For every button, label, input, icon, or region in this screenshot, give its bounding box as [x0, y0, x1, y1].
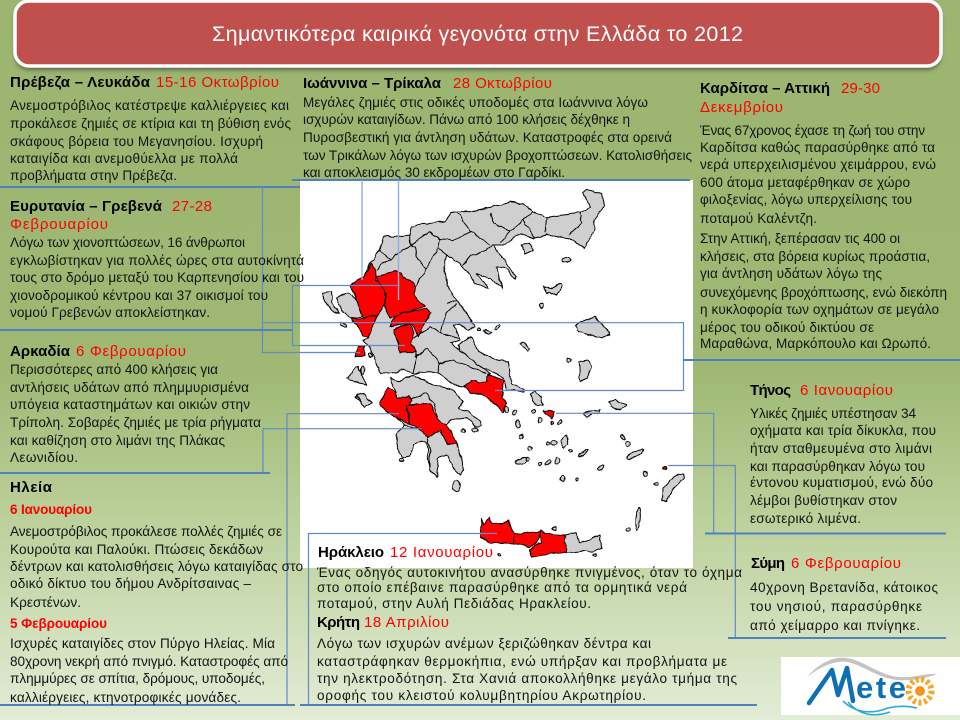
text block: Tinos: λέμβοι βυθίστηκαν στον	[750, 493, 897, 508]
text block: Preveza - Lefkada: προκάλεσε ζημιές σε κτίρια και τη βύθιση ενός	[10, 116, 291, 131]
text block: Evrytania - Grevena: Λόγω των χιονοπτώσεων, 16 άνθρωποι	[10, 235, 245, 250]
text block: Karditsa - Attica: Στην Αττική, ξεπέρασαν τις 400 οι	[700, 231, 900, 246]
text block: Tinos	[750, 382, 936, 526]
text block: Ilia: Ισχυρές καταιγίδες στον Πύργο Ηλείας. Μία	[10, 636, 275, 651]
text block: Karditsa - Attica: ποταμού Καλέντζη.	[700, 211, 817, 226]
text block: Preveza - Lefkada: Ανεμοστρόβιλος κατέστρεψε καλλιέργειες και	[10, 98, 289, 113]
text block: Karditsa - Attica: φιλοξενίας, λόγω υπερχείλισης του	[700, 192, 912, 207]
text block: Simi: Σύμη	[751, 555, 785, 572]
text block: Arcadia: υπόγεια καταστημάτων και οικιών στην	[10, 397, 250, 412]
text block: Arcadia: 6 Φεβρουαρίου	[76, 343, 186, 360]
text block: Crete: την ηλεκτροδότηση. Στα Χανιά αποκολλήθηκε μεγάλο τμήμα της	[317, 671, 737, 686]
text block: Crete: οροφής του κλειστού κολυμβητηρίου Ακρωτηρίου.	[317, 688, 646, 703]
text block: Ioannina - Trikala: Ιωάννινα – Τρίκαλα	[303, 75, 442, 92]
title banner: Σημαντικότερα καιρικά γεγονότα στην Ελλάδα το 2012	[212, 22, 743, 46]
text block: Karditsa - Attica: συνεχόμενης βροχόπτωσης, ενώ διεκόπη	[700, 285, 947, 300]
text block: Arcadia	[10, 343, 261, 465]
text block: Preveza - Lefkada: καταιγίδα και ανεμοθύελλα με πολλά	[10, 151, 238, 166]
text block: Ilia: 80χρονη νεκρή από πνιγμό. Καταστροφές από	[10, 654, 288, 669]
text block: Karditsa - Attica: 600 άτομα μεταφέρθηκαν σε χώρο	[700, 175, 910, 190]
text block: Evrytania - Grevena: Φεβρουαρίου	[10, 216, 108, 233]
text block: Ilia: Κουρούτα και Παλούκι. Πτώσεις δεκάδων	[10, 542, 263, 557]
text block: Tinos: ήταν σταθμευμένα στο λιμάνι	[750, 441, 932, 456]
text block: Karditsa - Attica: Καρδίτσα – Αττική	[700, 80, 830, 97]
text block: Ioannina - Trikala: Μεγάλες ζημιές στις οδικές υποδομές στα Ιωάννινα λόγω	[303, 95, 648, 110]
text block: Ilia: δέντρων και κατολισθήσεις λόγω καταιγίδας στο	[10, 559, 303, 574]
text block: Evrytania - Grevena	[10, 198, 304, 320]
text block: Ioannina - Trikala: ισχυρών καταιγίδων. Πάνω από 100 κλήσεις δέχθηκε η	[303, 112, 630, 127]
text block: Heraklion: στο οποίο επέβαινε παρασύρθηκε από τα ορμητικά νερά	[317, 580, 687, 595]
text block: Ilia: καλλιέργειες, κτηνοτροφικές μονάδες.	[10, 690, 241, 705]
title banner	[15, 1, 941, 70]
text block: Karditsa - Attica: Μαραθώνα, Μαρκόπουλο και Ωρωπό.	[700, 336, 931, 351]
text block: Crete	[317, 614, 737, 703]
text block: Crete: Κρήτη	[317, 614, 360, 631]
text block: Arcadia: και καθίζηση στο λιμάνι της Πλάκας	[10, 433, 225, 448]
text block: Ilia: Κρεστένων.	[10, 595, 81, 610]
text block: Simi	[750, 555, 938, 633]
text block: Ilia: Ηλεία	[10, 479, 53, 496]
text block: Tinos: οχήματα και τρία δίκυκλα, που	[750, 423, 936, 438]
text block: Karditsa - Attica: για άντληση υδάτων λόγω της	[700, 266, 882, 281]
map panel: Greece	[300, 180, 693, 568]
text block: Ilia: 6 Ιανουαρίου	[10, 502, 92, 517]
text block: Crete: καταστράφηκαν θερμοκήπια, ενώ υπήρξαν και προβλήματα με	[317, 654, 727, 669]
text block: Ioannina - Trikala: και αποκλεισμός 30 εκδρομέων στο Γαρδίκι.	[303, 165, 565, 180]
text block: Ioannina - Trikala: Πυροσβεστική για άντληση υδάτων. Καταστροφές στα ορεινά	[303, 130, 672, 145]
connector lines	[0, 180, 960, 706]
text block: Tinos: και παρασύρθηκαν λόγω του	[750, 459, 925, 474]
text block: Ioannina - Trikala: 28 Οκτωβρίου	[453, 75, 552, 92]
text block: Preveza - Lefkada	[10, 74, 291, 183]
text block: Karditsa - Attica: Ένας 67χρονος έχασε τη ζωή του στην	[699, 123, 925, 138]
text block: Preveza - Lefkada: 15-16 Οκτωβρίου	[156, 74, 279, 91]
text block: Heraklion: 12 Ιανουαρίου	[390, 544, 493, 561]
text block: Heraklion	[316, 544, 742, 611]
text block: Karditsa - Attica: νερά υπερχειλισμένου χειμάρρου, ενώ	[700, 157, 936, 172]
logo: Meteo	[781, 657, 960, 715]
text block: Tinos: έντονου κυματισμού, ενώ δύο	[750, 475, 933, 490]
text block: Arcadia: Λεωνιδίου.	[10, 450, 78, 465]
text block: Tinos: 6 Ιανουαρίου	[800, 382, 893, 399]
text block: Crete: 18 Απριλίου	[364, 614, 449, 631]
text block: Preveza - Lefkada: Πρέβεζα – Λευκάδα	[10, 74, 151, 91]
text block: Evrytania - Grevena: Ευρυτανία – Γρεβενά	[10, 198, 163, 215]
text block: Arcadia: Τρίπολη. Σοβαρές ζημιές με τρία ρήγματα	[10, 415, 261, 430]
text block: Karditsa - Attica: μέρος του οδικού δικτύου σε	[700, 320, 874, 335]
text block: Ilia: οδικό δίκτυο του δήμου Ανδρίτσαινας –	[10, 576, 251, 591]
text block: Ilia: Ανεμοστρόβιλος προκάλεσε πολλές ζημιές σε	[10, 524, 282, 539]
text block: Ioannina - Trikala: των Τρικάλων λόγω των ισχυρών βροχοπτώσεων. Κατολισθήσεις	[303, 148, 692, 163]
text block: Karditsa - Attica: η κυκλοφορία των οχημάτων σε μεγάλο	[700, 302, 939, 317]
text block: Karditsa - Attica	[699, 80, 947, 351]
text block: Simi: από χείμαρρο και πνίγηκε.	[750, 618, 920, 633]
text block: Ilia: 5 Φεβρουαρίου	[10, 616, 107, 631]
text block: Arcadia: αντλήσεις υδάτων από πλημμυρισμένα	[10, 380, 249, 395]
text block: Ilia: πλημμύρες σε σπίτια, δρόμους, υποδομές,	[10, 671, 265, 686]
text block: Heraklion: Ένας οδηγός αυτοκινήτου ανασύρθηκε πνιγμένος, όταν το όχημα	[316, 565, 742, 580]
text block: Preveza - Lefkada: προβλήματα στην Πρέβεζα.	[10, 168, 177, 183]
text block: Arcadia: Περισσότερες από 400 κλήσεις για	[10, 362, 218, 377]
text block: Ioannina - Trikala	[303, 75, 692, 180]
text block: Karditsa - Attica: Δεκεμβρίου	[700, 99, 783, 116]
text block: Tinos: Υλικές ζημιές υπέστησαν 34	[750, 406, 916, 421]
text block: Simi: του νησιού, παρασύρθηκε	[750, 599, 922, 614]
text block: Simi: 40χρονη Βρετανίδα, κάτοικος	[750, 580, 938, 595]
text block: Evrytania - Grevena: 27-28	[172, 198, 212, 215]
text block: Evrytania - Grevena: εγκλωβίστηκαν για πολλές ώρες στα αυτοκίνητά	[10, 253, 304, 268]
text block: Karditsa - Attica: Καρδίτσα καθώς παρασύρθηκε από τα	[700, 140, 935, 155]
text block: Evrytania - Grevena: νομού Γρεβενών αποκλείστηκαν.	[10, 305, 210, 320]
text block: Karditsa - Attica: κλήσεις, στα βόρεια κυρίως προάστια,	[700, 249, 930, 264]
text block: Heraklion: Ηράκλειο	[318, 544, 384, 561]
logo: Meteo: ete	[856, 670, 906, 705]
text block: Preveza - Lefkada: σκάφους βόρεια του Μεγανησίου. Ισχυρή	[10, 134, 263, 149]
text block: Arcadia: Αρκαδία	[10, 343, 71, 360]
text block: Evrytania - Grevena: χιονοδρομικού κέντρου και 37 οικισμοί του	[10, 288, 268, 303]
text block: Ilia	[10, 479, 303, 705]
text block: Simi: 6 Φεβρουαρίου	[791, 555, 901, 572]
text block: Tinos: εσωτερικό λιμένα.	[750, 511, 861, 526]
text block: Heraklion: ποταμού, στην Αυλή Πεδιάδας Ηρακλείου.	[317, 596, 591, 611]
text block: Evrytania - Grevena: τους στο δρόμο μεταξύ του Καρπενησίου και του	[10, 270, 304, 285]
text block: Karditsa - Attica: 29-30	[841, 80, 880, 97]
text block: Crete: Λόγω των ισχυρών ανέμων ξεριζώθηκαν δέντρα και	[317, 636, 651, 651]
text block: Tinos: Τήνος	[750, 382, 791, 399]
